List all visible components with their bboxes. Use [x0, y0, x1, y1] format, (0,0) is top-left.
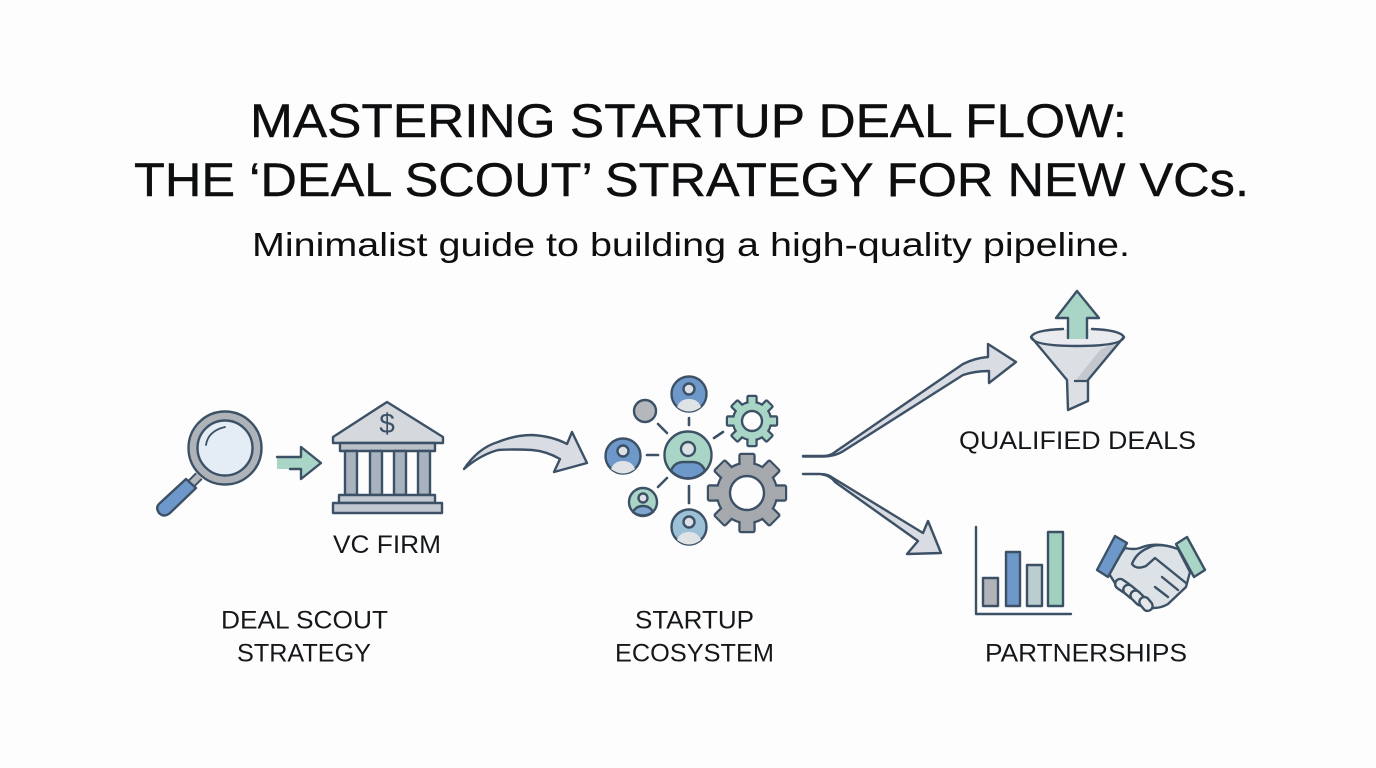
icon: bank building: $	[379, 408, 395, 439]
icon: large gear	[708, 454, 786, 532]
node: bottom person	[672, 510, 706, 544]
node: left person	[606, 438, 640, 474]
title	[134, 95, 1249, 207]
label: partnerships: PARTNERSHIPS	[985, 640, 1187, 668]
icon: small gear	[727, 396, 777, 446]
label: VC firm: VC FIRM	[333, 531, 441, 559]
title: THE ‘DEAL SCOUT’ STRATEGY FOR NEW VCs.	[134, 154, 1249, 207]
icon: handshake	[1097, 536, 1205, 613]
bar chart	[976, 527, 1071, 614]
arrow: scout to firm	[277, 447, 321, 479]
node: grey dot	[634, 400, 656, 422]
subtitle: Minimalist guide to building a high-quality pipeline.	[252, 226, 1130, 263]
label: startup ecosystem: ECOSYSTEM	[615, 640, 774, 668]
cuff: green	[1176, 537, 1205, 577]
fingers	[1113, 577, 1155, 613]
label: deal scout strategy: DEAL SCOUT	[221, 606, 388, 634]
node: top person	[672, 376, 706, 412]
cuff: blue	[1097, 536, 1127, 577]
node: central person	[664, 432, 712, 478]
label: startup ecosystem	[615, 606, 774, 668]
arrow: to qualified deals	[803, 344, 1016, 457]
label: startup ecosystem: STARTUP	[635, 606, 754, 634]
icon: magnifying glass	[157, 412, 262, 516]
icon: bank building	[333, 402, 443, 513]
label: deal scout strategy	[221, 606, 388, 668]
title: MASTERING STARTUP DEAL FLOW:	[250, 95, 1127, 148]
arrow: firm to ecosystem	[464, 432, 587, 472]
icon: funnel with up arrow	[1031, 291, 1124, 410]
arrow: to partnerships	[803, 474, 941, 554]
node: lower-left person	[629, 488, 657, 516]
label: deal scout strategy: STRATEGY	[237, 640, 371, 668]
network: startup ecosystem	[606, 376, 786, 544]
label: qualified deals: QUALIFIED DEALS	[959, 427, 1196, 455]
connector lines	[647, 418, 723, 503]
